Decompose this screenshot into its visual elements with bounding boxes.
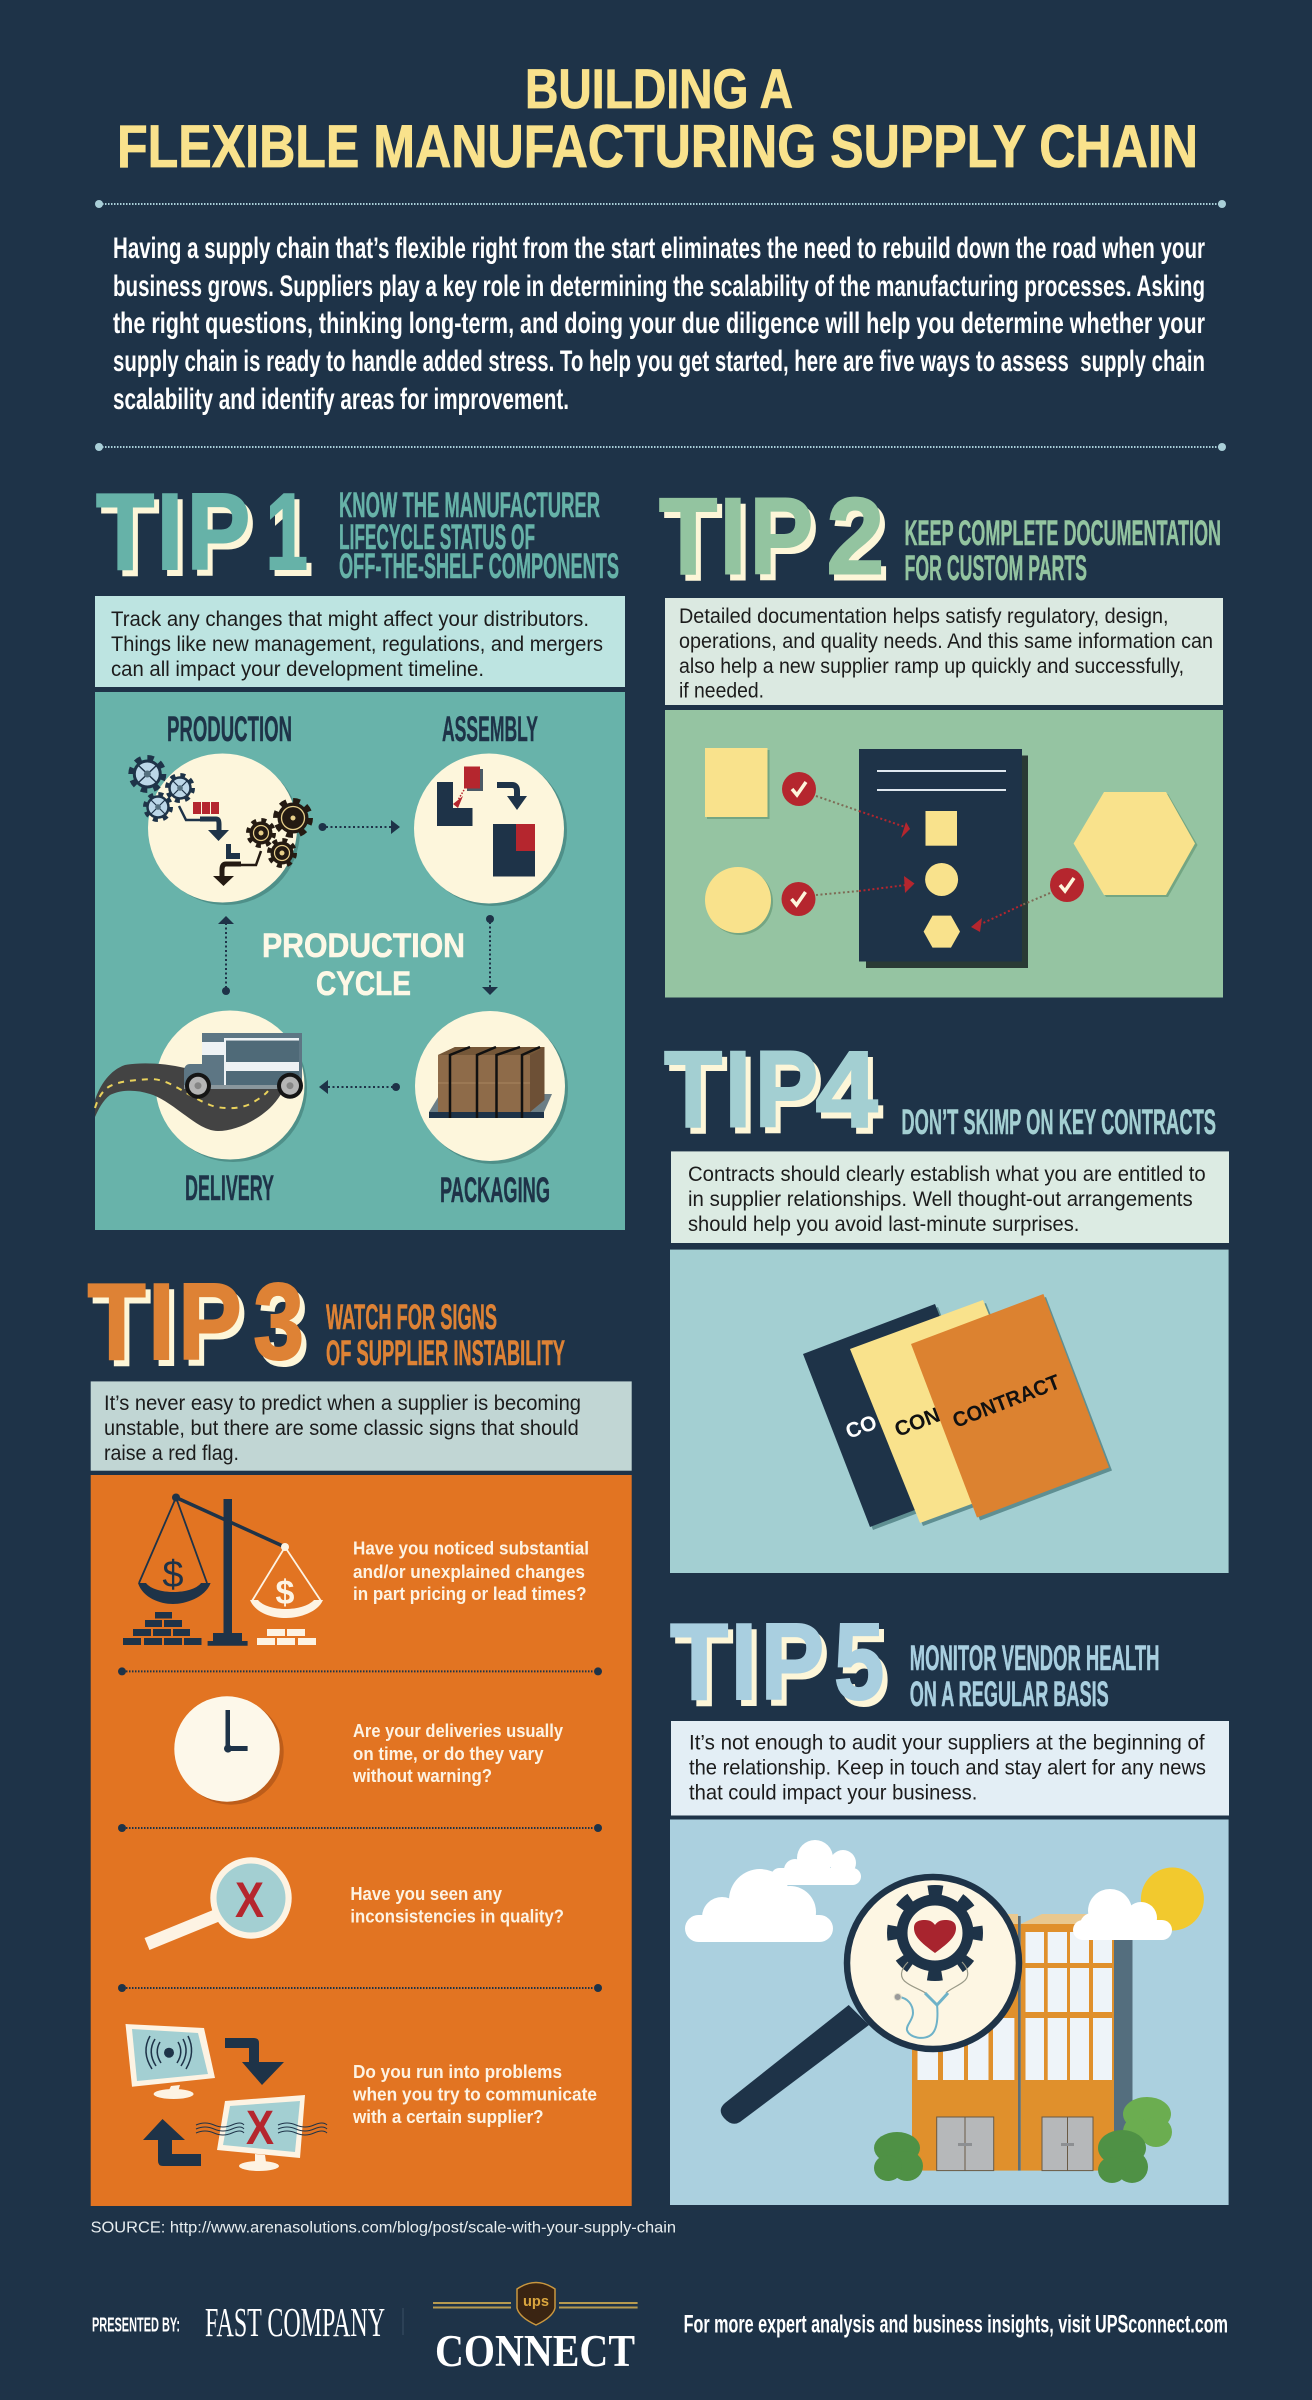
tip 5 description: the relationship. Keep in touch and stay alert for any news (689, 1756, 1206, 1780)
icon: magnifier with x: X (235, 1872, 264, 1928)
tip 3 subheading: WATCH FOR SIGNS (326, 1298, 497, 1337)
tip 2 description: also help a new supplier ramp up quickly and successfully, (679, 655, 1184, 678)
tip 3 heading: TIP (88, 1260, 242, 1382)
question 2: without warning? (352, 1766, 492, 1786)
question 4: Do you run into problems (353, 2062, 562, 2082)
truck (184, 1033, 303, 1099)
icon: office building (912, 1914, 1132, 2171)
question 4: when you try to communicate (352, 2085, 597, 2105)
fast company logo: FAST COMPANY (205, 2299, 385, 2345)
tip 4 heading: TIP (669, 1034, 823, 1156)
tip 3 subheading: OF SUPPLIER INSTABILITY (326, 1334, 565, 1373)
tip 4 section (664, 1028, 1229, 1573)
tip 4 description: Contracts should clearly establish what you are entitled to (688, 1163, 1206, 1186)
icon: assembly circle (414, 754, 567, 906)
tip 1 heading: TIP (101, 476, 255, 598)
icon: yellow contract: CON (892, 1403, 943, 1442)
question 3: Have you seen any (350, 1884, 502, 1904)
tip 4 heading: 4 (820, 1035, 883, 1157)
question 1 (353, 1538, 589, 1604)
question 1: in part pricing or lead times? (353, 1584, 586, 1604)
ups connect logo (433, 2282, 638, 2376)
icon: navy contract: CO (843, 1411, 880, 1444)
icon: monitors with broken communication (126, 2024, 327, 2171)
tip 1 description (95, 596, 625, 687)
tip 1 section (95, 470, 625, 1230)
intro text (113, 232, 1205, 416)
tip 5 heading: TIP (670, 1600, 824, 1722)
icon: square part (705, 748, 770, 819)
question 1: and/or unexplained changes (353, 1562, 585, 1582)
arrow: delivery to production (218, 916, 234, 995)
title: BUILDING A (525, 57, 793, 120)
tip 4 heading: TIP (664, 1028, 818, 1150)
tip 2 subheading: FOR CUSTOM PARTS (904, 549, 1087, 588)
question 2: Are your deliveries usually (353, 1721, 563, 1741)
tip 4 heading: 4 (815, 1029, 878, 1151)
icon: unbalanced scale: $ (276, 1574, 295, 1612)
question 1: Have you noticed substantial (353, 1538, 589, 1558)
icon: yellow contract (850, 1300, 1056, 1526)
center label: production cycle (262, 927, 465, 1003)
ups connect logo: CONNECT (435, 2326, 635, 2376)
tip 5 subheading: ON A REGULAR BASIS (910, 1675, 1109, 1714)
arrows to document (816, 796, 1050, 932)
question 2 (352, 1721, 563, 1786)
tip 3 description: It’s never easy to predict when a supplier is becoming (104, 1392, 581, 1415)
question 3: inconsistencies in quality? (350, 1907, 564, 1927)
icon: unbalanced scale: $ (162, 1554, 184, 1596)
tip 2 description: Detailed documentation helps satisfy regulatory, design, (679, 605, 1168, 628)
label: assembly: ASSEMBLY (442, 710, 538, 749)
icon: clock (174, 1696, 284, 1805)
tip 3 description: unstable, but there are some classic signs that should (104, 1417, 579, 1440)
tip 4 description: in supplier relationships. Well thought-out arrangements (688, 1188, 1193, 1211)
tip 2 heading: 2 (826, 476, 884, 598)
source line: SOURCE: http://www.arenasolutions.com/blog/post/scale-with-your-supply-chain (91, 2220, 676, 2237)
icon: delivery circle with truck (95, 1010, 307, 1162)
road (95, 1063, 285, 1131)
tip 2 subheading (904, 514, 1221, 588)
arrow: packaging to delivery (319, 1080, 400, 1094)
tip 1 subheading: LIFECYCLE STATUS OF (339, 518, 535, 557)
tip 1 heading: 1 (270, 477, 313, 599)
icon: hexagon part (1074, 792, 1198, 897)
icon: cloud small (771, 1840, 861, 1885)
tip 5 heading: 5 (834, 1601, 884, 1723)
icon: unbalanced scale (123, 1494, 323, 1646)
intro text: scalability and identify areas for improvement. (113, 383, 569, 416)
tip 1 heading: 1 (266, 471, 308, 593)
label: production: PRODUCTION (167, 710, 292, 749)
icon: orange contract: CONTRACT (950, 1371, 1063, 1433)
title (117, 57, 1198, 180)
icon: magnifying glass with gear and heart (721, 1877, 1019, 2124)
tip 1 subheading: OFF-THE-SHELF COMPONENTS (339, 547, 619, 586)
icon: check badges (782, 772, 1084, 916)
arrow: assembly to packaging (482, 915, 498, 995)
tip 3 heading (88, 1260, 309, 1389)
tip 1 subheading (339, 486, 619, 586)
tip 2 description: if needed. (679, 680, 764, 702)
question 4: with a certain supplier? (352, 2107, 544, 2127)
panel: vendor health scene (670, 1820, 1229, 2205)
tip 3 description: raise a red flag. (104, 1442, 239, 1465)
panel: documentation diagram (665, 710, 1223, 998)
tip 1 heading (96, 470, 313, 599)
icon: magnifier with x (147, 1857, 292, 1944)
icon: cloud over building (1073, 1889, 1172, 1940)
center label: production cycle: CYCLE (316, 965, 411, 1003)
tip 3 heading: 3 (253, 1261, 304, 1383)
tip 3 section (88, 1260, 632, 2206)
presented by: PRESENTED BY: (92, 2314, 180, 2336)
ups connect logo: ups (523, 2293, 549, 2310)
question 3 (350, 1884, 564, 1927)
document (859, 749, 1028, 968)
tip 3 description (91, 1381, 632, 1471)
tip 2 heading: TIP (659, 475, 813, 597)
tip 3 heading: TIP (93, 1266, 247, 1388)
question 2: on time, or do they vary (353, 1744, 544, 1764)
tip 5 heading (670, 1600, 889, 1729)
tip 5 description: It’s not enough to audit your suppliers at the beginning of (689, 1732, 1205, 1754)
tip 1 description: Track any changes that might affect your distributors. (111, 608, 589, 631)
icon: production circle with gears (131, 754, 310, 905)
tip 5 description (671, 1721, 1229, 1816)
tip 2 description (665, 598, 1223, 705)
icon: bushes (874, 2097, 1172, 2183)
tip 4 description (671, 1151, 1229, 1243)
tip 2 heading: 2 (831, 482, 889, 604)
tip 1 description: Things like new management, regulations, and mergers (111, 633, 603, 656)
center label: production cycle: PRODUCTION (262, 927, 465, 965)
tip 5 heading: 5 (839, 1607, 889, 1729)
tip 5 section (670, 1600, 1229, 2205)
question 4 (352, 2062, 597, 2127)
footer (92, 2282, 1228, 2376)
tip 3 heading: 3 (258, 1267, 309, 1389)
icon: navy contract (803, 1304, 1005, 1530)
icon: orange contract (911, 1294, 1112, 1520)
icon: circle part (705, 867, 773, 935)
tip 2 heading: TIP (664, 481, 818, 603)
icon: packaging circle (415, 1011, 568, 1164)
tip 4 heading (664, 1028, 883, 1157)
tip 2 section (659, 475, 1223, 998)
tip 2 description: operations, and quality needs. And this same information can (679, 630, 1213, 653)
label: packaging: PACKAGING (440, 1171, 550, 1210)
panel: warning signs (91, 1475, 632, 2206)
tip 2 heading (659, 475, 889, 604)
icon: cloud large (685, 1869, 833, 1942)
tip 5 subheading (910, 1639, 1160, 1714)
label: delivery: DELIVERY (185, 1169, 274, 1208)
icon: monitors with broken communication: X (246, 2102, 274, 2155)
tip 1 description: can all impact your development timeline. (111, 658, 484, 681)
tip 5 heading: TIP (675, 1606, 829, 1728)
panel: contracts (670, 1250, 1229, 1573)
tip 4 description: should help you avoid last-minute surprises. (688, 1213, 1079, 1236)
icon: sun (1141, 1868, 1204, 1930)
arrow: production to assembly (318, 820, 400, 834)
panel: production cycle (95, 692, 625, 1230)
tip 5 description: that could impact your business. (689, 1782, 977, 1804)
tip 1 subheading: KNOW THE MANUFACTURER (339, 486, 600, 525)
tip 1 heading: TIP (96, 470, 250, 592)
tip 3 subheading (326, 1298, 565, 1373)
